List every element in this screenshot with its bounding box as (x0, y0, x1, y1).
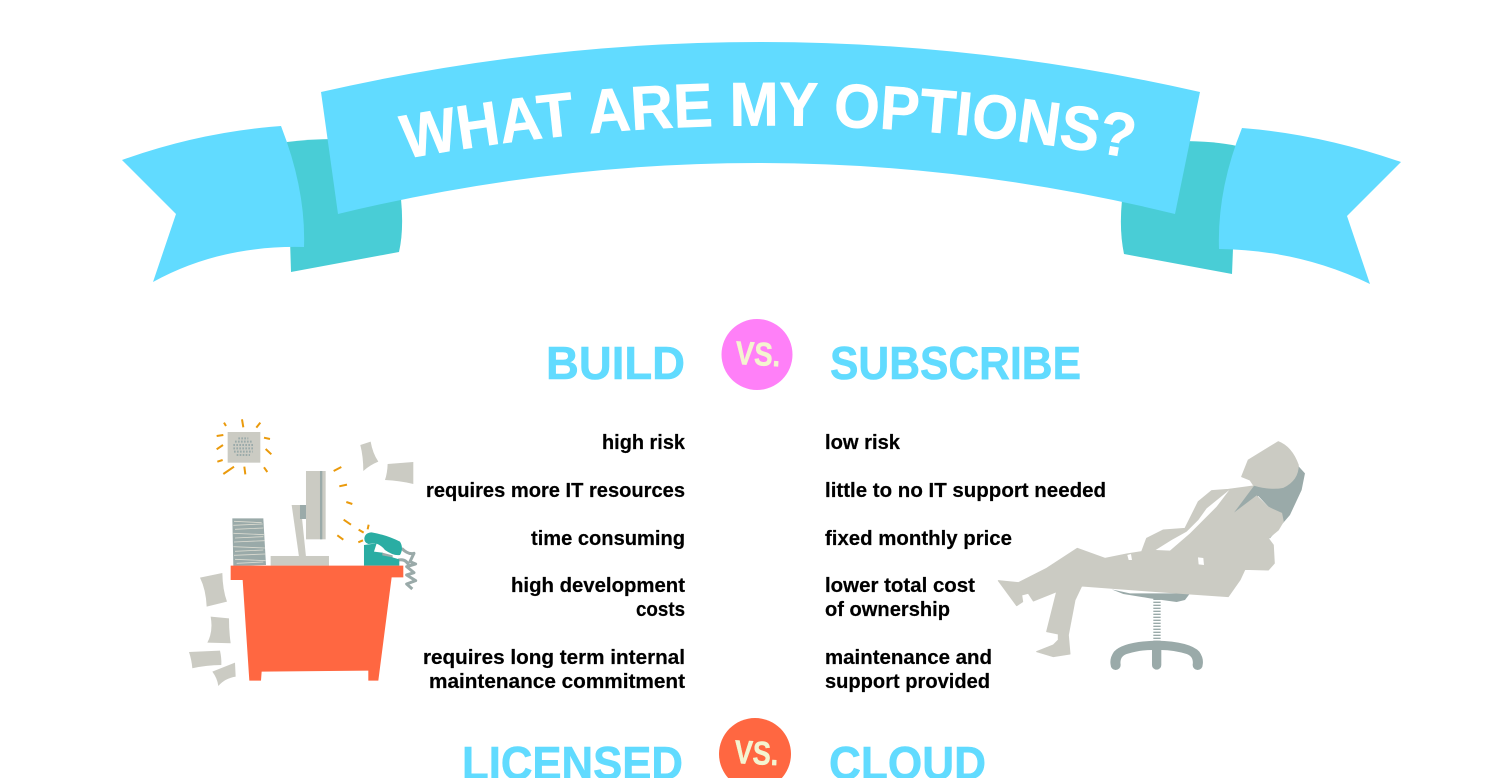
list: build drawbacks: requires long term internal (423, 647, 685, 669)
title banner (122, 42, 1401, 284)
icon: signal rays (334, 467, 369, 542)
chair back (1232, 466, 1305, 538)
list: subscribe benefits: fixed monthly price (825, 528, 1012, 550)
list: subscribe benefits: low risk (825, 432, 901, 454)
list: subscribe benefits: lower total cost (825, 575, 975, 597)
icon: computer monitor (271, 471, 329, 566)
chair base (1110, 641, 1203, 670)
illustration: cluttered desk (189, 419, 416, 686)
icon: orange desk (231, 566, 403, 681)
ribbon main band (321, 42, 1200, 214)
list: build drawbacks: costs (636, 599, 685, 621)
list: subscribe benefits (825, 432, 1106, 693)
list: subscribe benefits: maintenance and (825, 647, 992, 669)
heading: subscribe: SUBSCRIBE (830, 337, 1081, 389)
heading: build: BUILD (546, 337, 685, 389)
list: subscribe benefits: support provided (825, 671, 990, 693)
badge: vs pink: VS. (735, 334, 782, 373)
list: build drawbacks (423, 432, 686, 693)
icon: flying papers (189, 442, 413, 686)
ribbon tail left (122, 126, 304, 282)
list: build drawbacks: high development (511, 575, 685, 597)
list: build drawbacks: time consuming (531, 528, 685, 550)
banner title text: WHAT ARE MY OPTIONS? (398, 82, 1134, 158)
ribbon fold right (1121, 141, 1237, 274)
shirt gap (1127, 490, 1229, 565)
ribbon tail right (1219, 128, 1401, 284)
badge: vs orange: VS. (734, 733, 780, 772)
chair seat (1112, 589, 1190, 602)
list: build drawbacks: requires more IT resources (426, 480, 685, 502)
list: build drawbacks: high risk (602, 432, 686, 454)
list: subscribe benefits: little to no IT support needed (825, 480, 1106, 502)
badge: vs orange (719, 718, 791, 778)
man silhouette (998, 442, 1298, 657)
list: subscribe benefits: of ownership (825, 599, 950, 621)
ribbon fold left (287, 139, 402, 272)
icon: wall clock with rays (217, 419, 271, 474)
chair spring (1146, 596, 1168, 643)
illustration: relaxed man in chair (998, 442, 1305, 670)
icon: telephone (364, 532, 416, 589)
list: build drawbacks: maintenance commitment (429, 671, 685, 693)
icon: stack of papers (232, 518, 266, 566)
badge: vs pink (722, 319, 792, 390)
